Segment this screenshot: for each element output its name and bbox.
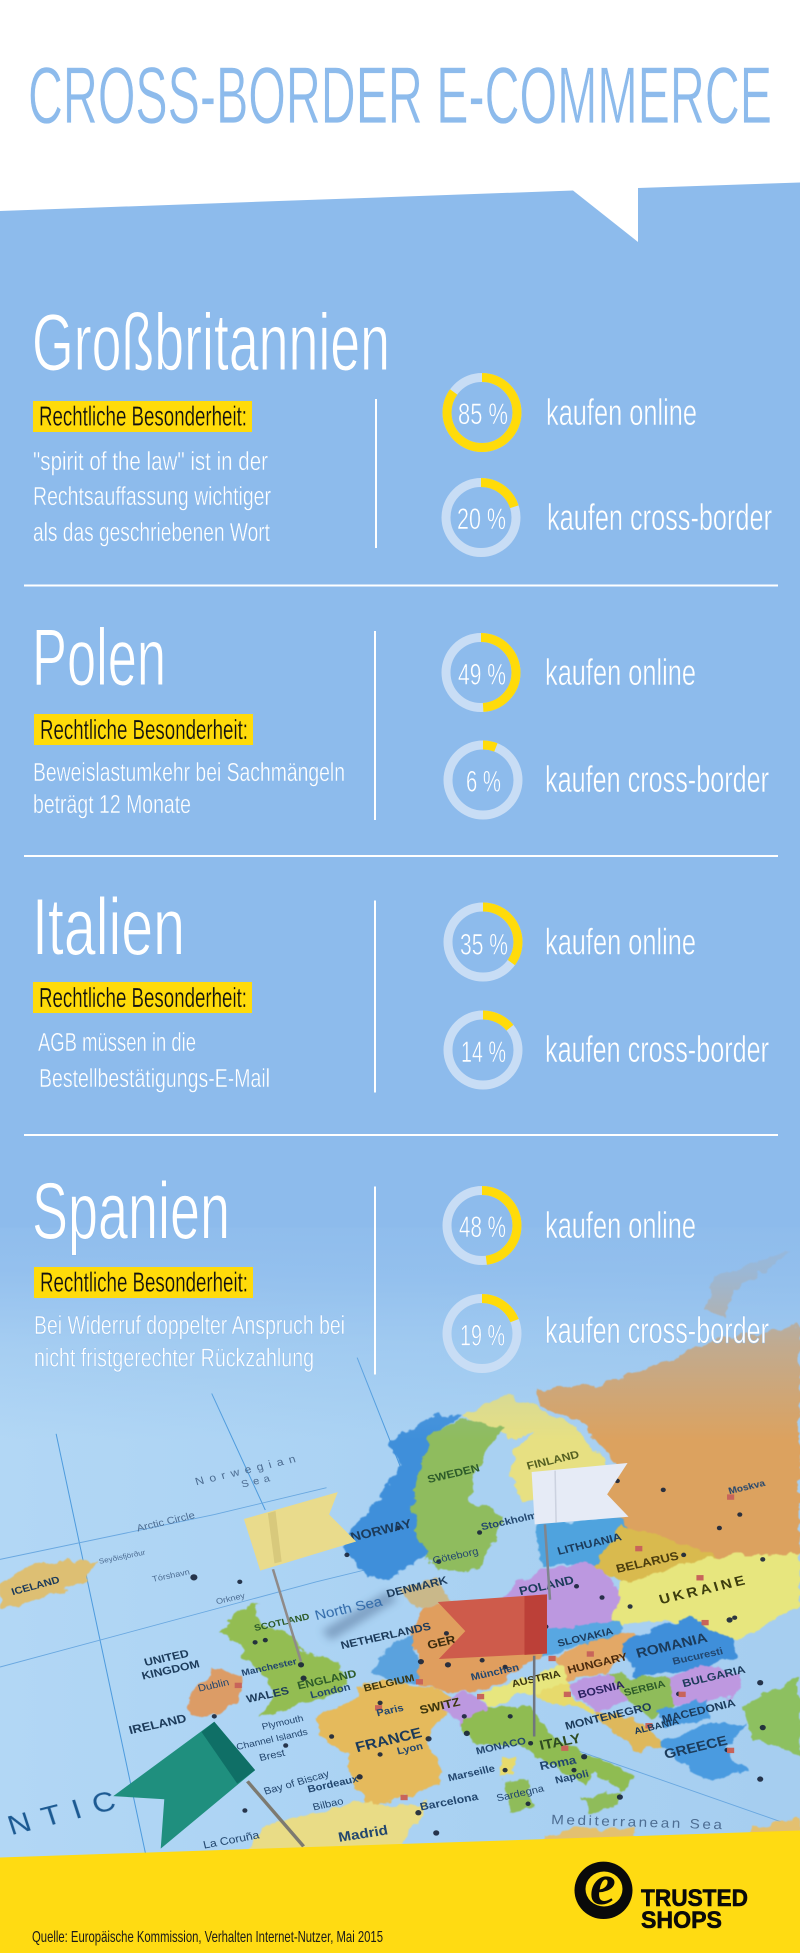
badge: Rechtliche Besonderheit: bbox=[39, 982, 247, 1013]
map labels: SCOTLAND bbox=[253, 1612, 311, 1634]
legal note: Bei Widerruf doppelter Anspruch bei bbox=[34, 1312, 345, 1340]
legal note: als das geschriebenen Wort bbox=[33, 519, 270, 547]
ring: 6 % cross-border bbox=[448, 745, 518, 815]
ring: 35 % online bbox=[448, 907, 518, 977]
map labels: La Coruña bbox=[202, 1830, 261, 1851]
map labels: Tórshavn bbox=[151, 1567, 191, 1584]
map labels: BOSNIA bbox=[577, 1679, 627, 1701]
map labels: GER bbox=[426, 1633, 457, 1652]
map labels: Plymouth bbox=[261, 1714, 305, 1733]
heading: Großbritannien bbox=[32, 298, 390, 388]
divider bbox=[374, 631, 376, 820]
map photo with pins bbox=[0, 1228, 800, 1878]
legal note: AGB müssen in die bbox=[38, 1029, 196, 1057]
map labels: NETHERLANDS bbox=[340, 1621, 433, 1652]
ring: 20 % cross-border: 20 % bbox=[457, 503, 506, 536]
map labels: Bay of Biscay bbox=[262, 1768, 332, 1797]
land: northern coast bbox=[704, 1250, 791, 1317]
map labels: Barcelona bbox=[419, 1791, 480, 1813]
panel: Spanien bbox=[32, 1166, 769, 1374]
map labels: München bbox=[470, 1662, 520, 1683]
legal note bbox=[38, 1029, 270, 1093]
map labels: UNITED bbox=[143, 1648, 190, 1669]
map labels: BELARUS bbox=[615, 1549, 680, 1576]
capitals bbox=[235, 1494, 734, 1800]
yellow footer band bbox=[0, 1830, 800, 1953]
legal note: beträgt 12 Monate bbox=[33, 791, 191, 819]
map labels: POLAND bbox=[518, 1573, 575, 1598]
map labels: Göteborg bbox=[431, 1546, 480, 1567]
map labels: London bbox=[309, 1682, 352, 1701]
map labels: Seyðisfjörður bbox=[98, 1548, 147, 1566]
map labels: Stockholm bbox=[480, 1510, 538, 1533]
city dots bbox=[190, 1479, 766, 1836]
ring: 35 % online: 35 % bbox=[460, 928, 508, 962]
map labels: SWEDEN bbox=[426, 1463, 481, 1486]
map labels: SWITZ bbox=[418, 1695, 462, 1717]
map labels: FRANCE bbox=[354, 1725, 424, 1756]
map labels: IRELAND bbox=[127, 1712, 188, 1737]
map labels: Arctic Circle bbox=[135, 1510, 196, 1534]
map labels: WALES bbox=[245, 1685, 291, 1706]
map labels: Bordeaux bbox=[306, 1773, 360, 1795]
map labels: Manchester bbox=[240, 1657, 298, 1679]
white header background bbox=[0, 0, 800, 260]
heading: Italien bbox=[32, 882, 185, 972]
map labels: SLOVAKIA bbox=[556, 1626, 615, 1650]
ring: 14 % cross-border bbox=[448, 1015, 518, 1085]
map labels: Sardegna bbox=[495, 1783, 546, 1804]
map labels: Norwegian bbox=[194, 1453, 303, 1488]
heading: Spanien bbox=[32, 1166, 230, 1256]
land: eastern europe bbox=[503, 1559, 625, 1633]
ring: 14 % cross-border: 14 % bbox=[461, 1036, 506, 1069]
ring: 20 % cross-border bbox=[446, 482, 516, 552]
map labels: GREECE bbox=[663, 1733, 730, 1763]
legal note bbox=[33, 448, 271, 547]
map labels: Bucuresti bbox=[671, 1646, 724, 1667]
white push pin bbox=[532, 1463, 629, 1600]
legal note bbox=[34, 1312, 345, 1372]
logo: Trusted Shops: SHOPS bbox=[641, 1907, 722, 1934]
logo: Trusted Shops: e bbox=[590, 1852, 616, 1917]
badge: Rechtliche Besonderheit: bbox=[39, 400, 247, 432]
heading: Polen bbox=[32, 613, 166, 703]
map labels: Paris bbox=[375, 1702, 405, 1719]
map labels bbox=[4, 1449, 767, 1851]
map labels: Brest bbox=[258, 1747, 286, 1764]
map labels: NORWAY bbox=[349, 1516, 413, 1544]
green push pin bbox=[113, 1722, 304, 1849]
panel: Italien bbox=[32, 882, 769, 1093]
map labels: Sea bbox=[240, 1472, 276, 1490]
land: british isles bbox=[219, 1606, 347, 1716]
ring: 49 % online bbox=[446, 638, 516, 708]
label: kaufen online: kaufen online bbox=[545, 1205, 696, 1246]
yellow push pin bbox=[244, 1492, 356, 1662]
ring: 85 % online bbox=[447, 378, 517, 448]
land: western europe bbox=[316, 1683, 459, 1806]
separator bbox=[24, 584, 778, 586]
map labels: Dublin bbox=[197, 1677, 231, 1694]
label: kaufen online: kaufen online bbox=[545, 652, 696, 693]
map labels: NTIC bbox=[4, 1782, 131, 1841]
map labels: UKRAINE bbox=[657, 1573, 750, 1608]
divider bbox=[375, 399, 377, 548]
badge bbox=[33, 982, 252, 1013]
ring: 49 % online: 49 % bbox=[458, 658, 506, 692]
land: alps and italy bbox=[439, 1692, 492, 1728]
legal note: Rechtsauffassung wichtiger bbox=[33, 483, 271, 511]
divider bbox=[374, 900, 376, 1092]
map labels: ALBANIA bbox=[633, 1717, 680, 1737]
legal note: Bestellbestätigungs-E-Mail bbox=[39, 1065, 270, 1093]
map labels: ICELAND bbox=[10, 1574, 62, 1598]
map labels: FINLAND bbox=[526, 1449, 581, 1472]
panel: Polen bbox=[32, 613, 769, 820]
separator bbox=[24, 1134, 778, 1136]
red push pin bbox=[438, 1594, 547, 1737]
ring: 48 % online bbox=[447, 1190, 517, 1260]
ring: 48 % online: 48 % bbox=[459, 1211, 506, 1244]
legal note: "spirit of the law" ist in der bbox=[33, 448, 268, 476]
map labels: Marseille bbox=[447, 1763, 496, 1784]
divider bbox=[374, 1186, 376, 1374]
map labels: Mediterranean Sea bbox=[551, 1813, 725, 1833]
ring: 19 % cross-border: 19 % bbox=[460, 1320, 505, 1352]
badge: Rechtliche Besonderheit: bbox=[40, 714, 248, 745]
map labels: BELGIUM bbox=[362, 1672, 416, 1694]
badge bbox=[34, 714, 253, 745]
map labels: Madrid bbox=[337, 1823, 389, 1846]
source note: Quelle: Europäische Kommission, Verhalten Internet-Nutzer, Mai 2015 bbox=[32, 1929, 383, 1946]
map labels: ENGLAND bbox=[296, 1668, 358, 1692]
legal note: Beweislastumkehr bei Sachmängeln bbox=[33, 759, 345, 787]
map labels: Bilbao bbox=[311, 1796, 345, 1813]
map labels: AUSTRIA bbox=[510, 1668, 562, 1690]
map labels: Channel Islands bbox=[235, 1727, 309, 1753]
map top gradient bbox=[0, 1200, 800, 1440]
separator bbox=[24, 855, 778, 857]
ring: 19 % cross-border bbox=[447, 1298, 517, 1368]
map labels: Roma bbox=[538, 1753, 579, 1773]
map labels: ITALY bbox=[538, 1731, 583, 1754]
logo: Trusted Shops bbox=[574, 1852, 748, 1934]
map labels: ROMANIA bbox=[634, 1630, 710, 1662]
panel: Großbritannien bbox=[32, 298, 772, 552]
label: kaufen online: kaufen online bbox=[545, 922, 696, 962]
map labels: MONTENEGRO bbox=[564, 1701, 653, 1732]
legal note bbox=[33, 759, 345, 819]
map labels: Orkney bbox=[215, 1591, 247, 1606]
map labels: Napoli bbox=[554, 1768, 590, 1786]
label: kaufen online: kaufen online bbox=[546, 392, 697, 433]
map labels: North Sea bbox=[313, 1594, 384, 1624]
logo: Trusted Shops: TRUSTED bbox=[641, 1885, 748, 1912]
ring: 85 % online: 85 % bbox=[458, 398, 508, 431]
map labels: Lyon bbox=[396, 1741, 424, 1757]
map labels: DENMARK bbox=[385, 1575, 450, 1600]
map labels: HUNGARY bbox=[566, 1652, 629, 1676]
map labels: KINGDOM bbox=[141, 1659, 201, 1682]
map labels: SERBIA bbox=[623, 1678, 667, 1699]
map labels: MACEDONIA bbox=[661, 1698, 738, 1726]
map labels: LITHUANIA bbox=[556, 1532, 624, 1558]
badge bbox=[34, 1266, 253, 1298]
ring: 6 % cross-border: 6 % bbox=[466, 766, 501, 798]
legal note: nicht fristgerechter Rückzahlung bbox=[34, 1344, 314, 1372]
map labels: Moskva bbox=[727, 1478, 767, 1497]
badge: Rechtliche Besonderheit: bbox=[40, 1266, 248, 1298]
badge bbox=[33, 400, 252, 432]
map labels: BULGARIA bbox=[681, 1664, 748, 1690]
flag shadows bbox=[327, 1595, 393, 1636]
map labels: MONACO bbox=[475, 1735, 527, 1757]
